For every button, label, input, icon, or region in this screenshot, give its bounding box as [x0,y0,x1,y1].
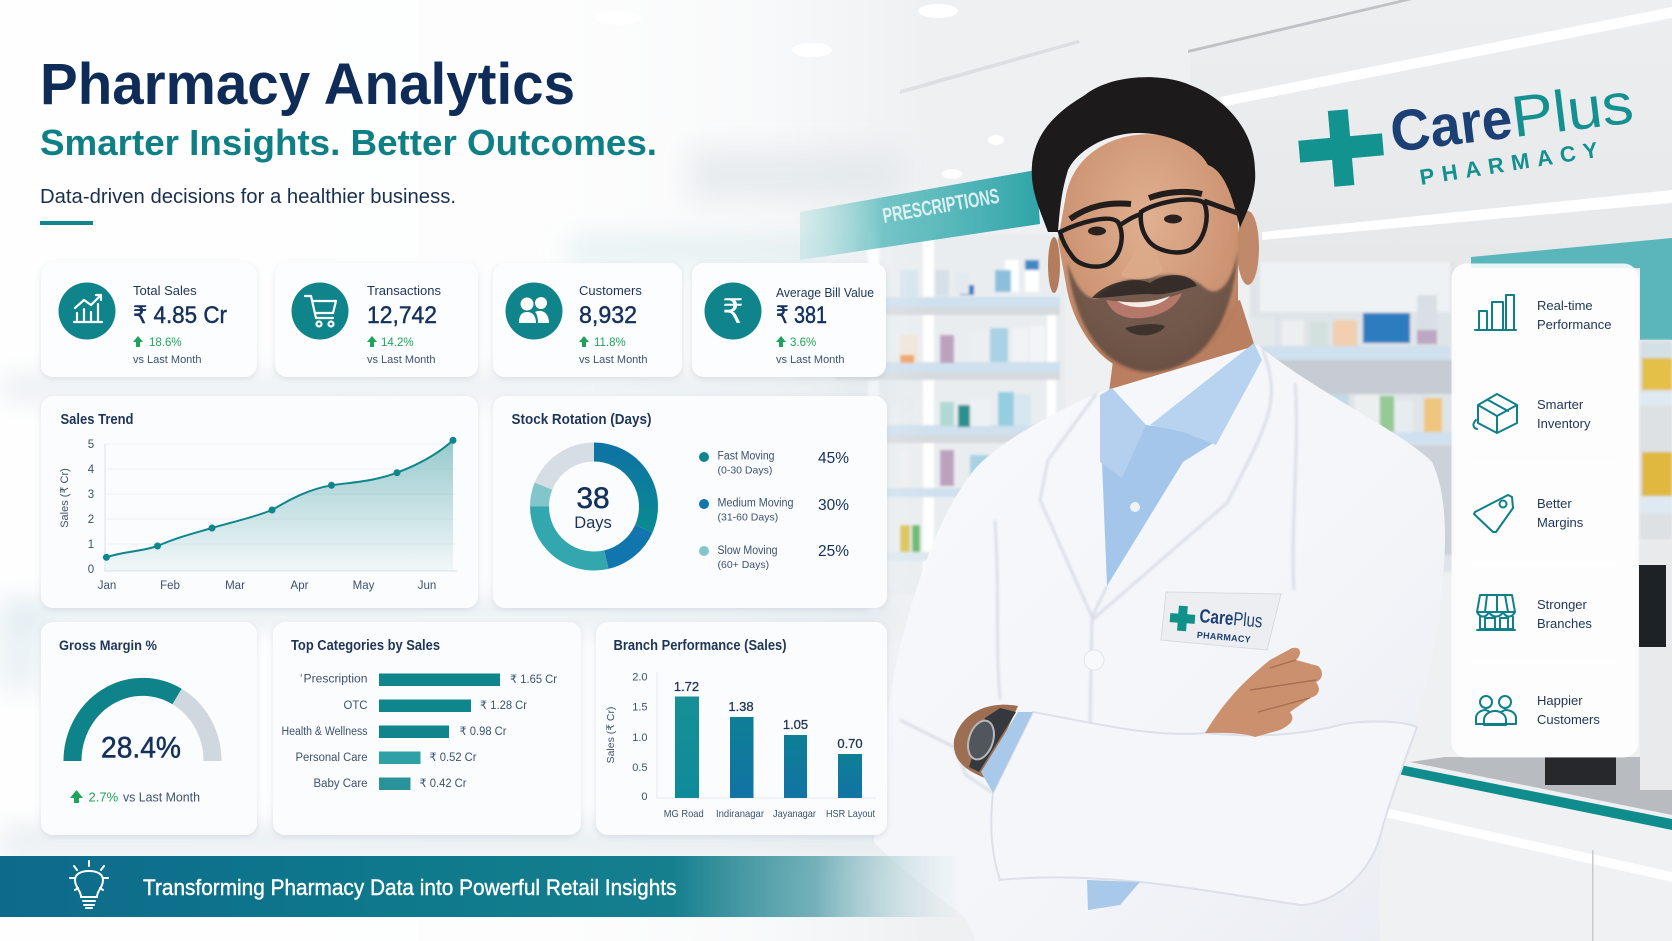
accent bar [40,221,93,225]
column chart: 0 [641,791,648,803]
line chart [59,437,457,592]
icon: storefront [1477,595,1515,630]
shirt at bottom [1087,880,1140,910]
text: stronger branches [1537,597,1592,631]
line chart: Sales (₹ Cr) [59,468,71,528]
subtitle: Smarter Insights. Better Outcomes. [40,122,657,163]
text: stronger branches: Stronger [1537,597,1588,612]
KPI card: total sales: vs Last Month [133,354,201,366]
legend: (60+ Days) [718,559,769,571]
horizontal bar chart: ʻ [300,674,303,686]
coat badge [1161,592,1281,650]
panel: sales trend: Sales Trend [60,412,134,428]
store sign: CarePlus Pharmacy: PHARMACY [1418,137,1600,190]
legend: (31-60 Days) [718,512,778,524]
line chart: 0 [88,564,94,576]
column chart: Sales (₹ Cr) [605,707,617,763]
hair [1032,77,1255,232]
icon: cart [292,282,348,340]
KPI card: customers: 11.8% [594,337,626,349]
KPI card: customers: 8,932 [579,302,637,329]
panel: top categories: Top Categories by Sales [291,638,440,654]
horizontal bar chart: OTC [344,700,368,712]
KPI card: customers [493,263,682,377]
lab coat [874,345,1445,941]
horizontal bar chart: ₹ 0.98 Cr [460,726,507,738]
legend: Medium Moving [718,498,794,510]
hand [1205,648,1322,737]
line chart: May [353,580,375,592]
panel: gross margin [41,622,257,835]
horizontal bar chart: ₹ 0.42 Cr [420,778,467,790]
icon: price tag [1474,495,1513,532]
panel: sales trend [41,396,478,608]
banner [0,856,960,917]
banner: Transforming Pharmacy Data into Powerful Retail Insights [143,875,676,900]
column chart: 0.5 [632,762,648,774]
line chart: 5 [88,439,94,451]
sign: prescriptions: PRESCRIPTIONS [881,185,1001,228]
KPI card: average bill value: 3.6% [790,337,816,349]
KPI card: customers: vs Last Month [579,354,647,366]
pharmacist portrait [874,77,1445,941]
forearm sleeve [991,712,1417,905]
lapels and coat folds [900,348,1296,793]
legend: Fast Moving [718,450,774,462]
horizontal bar chart: Health & Wellness [282,726,368,738]
KPI card: customers: Customers [579,283,642,298]
column chart: MG Road [664,808,704,820]
icon: customers [1476,696,1516,725]
KPI card: average bill value: vs Last Month [776,354,844,366]
text: real-time performance: Real-time [1537,298,1593,313]
KPI card: transactions: vs Last Month [367,354,435,366]
horizontal bar chart: Baby Care [314,778,368,790]
KPI card: average bill value: Average Bill Value [776,285,874,300]
blurred background tints [0,150,900,854]
legend [699,450,849,571]
line chart: Mar [225,580,245,592]
column chart: 1.0 [632,732,648,744]
store sign: CarePlus Pharmacy [1296,71,1637,190]
coat badge: Plus [1232,609,1263,632]
horizontal bar chart [282,674,557,790]
horizontal bar chart: Prescription [304,674,368,686]
KPI card: average bill value [692,263,886,377]
text: smarter inventory [1537,397,1591,431]
gauge: 28.4% [101,732,181,764]
panel: gross margin: Gross Margin % [59,637,157,653]
gauge [72,687,213,764]
KPI card: total sales: ₹ 4.85 Cr [133,302,227,329]
panel: benefits [1452,264,1638,758]
store sign: CarePlus Pharmacy: Care [1387,86,1516,165]
column chart: 2.0 [632,672,648,684]
icon: users [506,282,562,340]
line chart: 1 [88,539,94,551]
store sign: CarePlus Pharmacy: Plus [1508,71,1637,150]
donut chart: 38 [576,482,610,515]
column chart: 1.38 [728,699,754,714]
mouth [1106,293,1182,318]
left white fade overlay [0,0,930,941]
text: stronger branches: Branches [1537,616,1592,631]
line chart: Jun [418,580,436,592]
column chart: HSR Layout [826,808,875,820]
line chart: 4 [88,464,95,476]
text: smarter inventory: Inventory [1537,416,1591,431]
eyebrows and eyes [1070,203,1131,219]
icon: growth chart [58,282,116,340]
line chart: Feb [160,580,180,592]
column chart: Indiranagar [716,808,764,820]
coat badge: PHARMACY [1196,630,1251,645]
text: better margins: Better [1537,496,1572,511]
text: happier customers: Happier [1537,693,1583,708]
column chart: Jayanagar [773,808,816,820]
neck and ears [1237,211,1259,285]
KPI card: average bill value: ₹ 381 [776,302,827,329]
glasses [1060,200,1240,267]
column chart: 0.70 [837,736,863,751]
column chart: 1.05 [783,717,808,732]
icon: rupee [704,282,762,340]
column chart: 1.5 [632,702,648,714]
goatee [1125,324,1165,335]
icon: rupee: ₹ [722,293,744,331]
text: real-time performance [1537,298,1611,332]
legend: 25% [818,543,849,560]
horizontal bar chart: Personal Care [296,752,368,764]
panel: stock rotation [493,396,887,608]
sign: prescriptions [800,170,1040,260]
beard stubble [1067,250,1238,372]
line chart: 3 [88,489,94,501]
text: real-time performance: Performance [1537,317,1611,332]
KPI card: transactions: Transactions [367,283,441,298]
horizontal bar chart: ₹ 1.65 Cr [510,674,557,686]
column chart [605,672,876,820]
legend: (0-30 Days) [718,464,772,476]
text: better margins [1537,496,1584,530]
coat button [1084,650,1104,670]
panel: branch performance: Branch Performance (Sales) [614,638,787,654]
face [1058,134,1238,374]
KPI card: total sales: Total Sales [133,283,197,298]
tagline: Data-driven decisions for a healthier business. [40,185,456,208]
moustache [1092,275,1197,298]
wrist, cuff and watch [954,705,1018,778]
panel: branch performance [596,622,887,835]
panel: gross margin: 2.7% [88,790,119,804]
icon: box [1473,394,1517,433]
KPI card: total sales: 18.6% [149,337,182,349]
KPI card: total sales [41,263,257,377]
icon: sign cross [1296,106,1386,190]
nose [1122,240,1163,279]
column chart: 1.72 [674,679,699,694]
KPI card: transactions: 14.2% [381,337,414,349]
KPI card: transactions: 12,742 [367,302,437,329]
panel: gross margin: vs Last Month [123,790,200,804]
horizontal bar chart: ₹ 0.52 Cr [430,752,477,764]
line chart: Apr [291,580,309,592]
legend: 45% [818,450,849,467]
donut chart [540,452,649,561]
text: smarter inventory: Smarter [1537,397,1584,412]
text: better margins: Margins [1537,515,1584,530]
icon: light bulb [70,861,108,908]
KPI card: transactions [275,263,478,377]
text: happier customers [1537,693,1600,727]
coat badge: Care [1199,606,1234,630]
donut chart: Days [574,514,612,532]
line chart: Jan [98,580,116,592]
text: happier customers: Customers [1537,712,1600,727]
legend: 30% [818,497,849,514]
line chart: 2 [88,514,94,526]
title: Pharmacy Analytics [40,52,575,117]
panel: stock rotation: Stock Rotation (Days) [512,412,652,428]
shirt [1102,400,1218,586]
panel: top categories [273,622,581,835]
icon: bar chart [1475,295,1516,330]
horizontal bar chart: ₹ 1.28 Cr [480,700,527,712]
legend: Slow Moving [718,545,778,557]
